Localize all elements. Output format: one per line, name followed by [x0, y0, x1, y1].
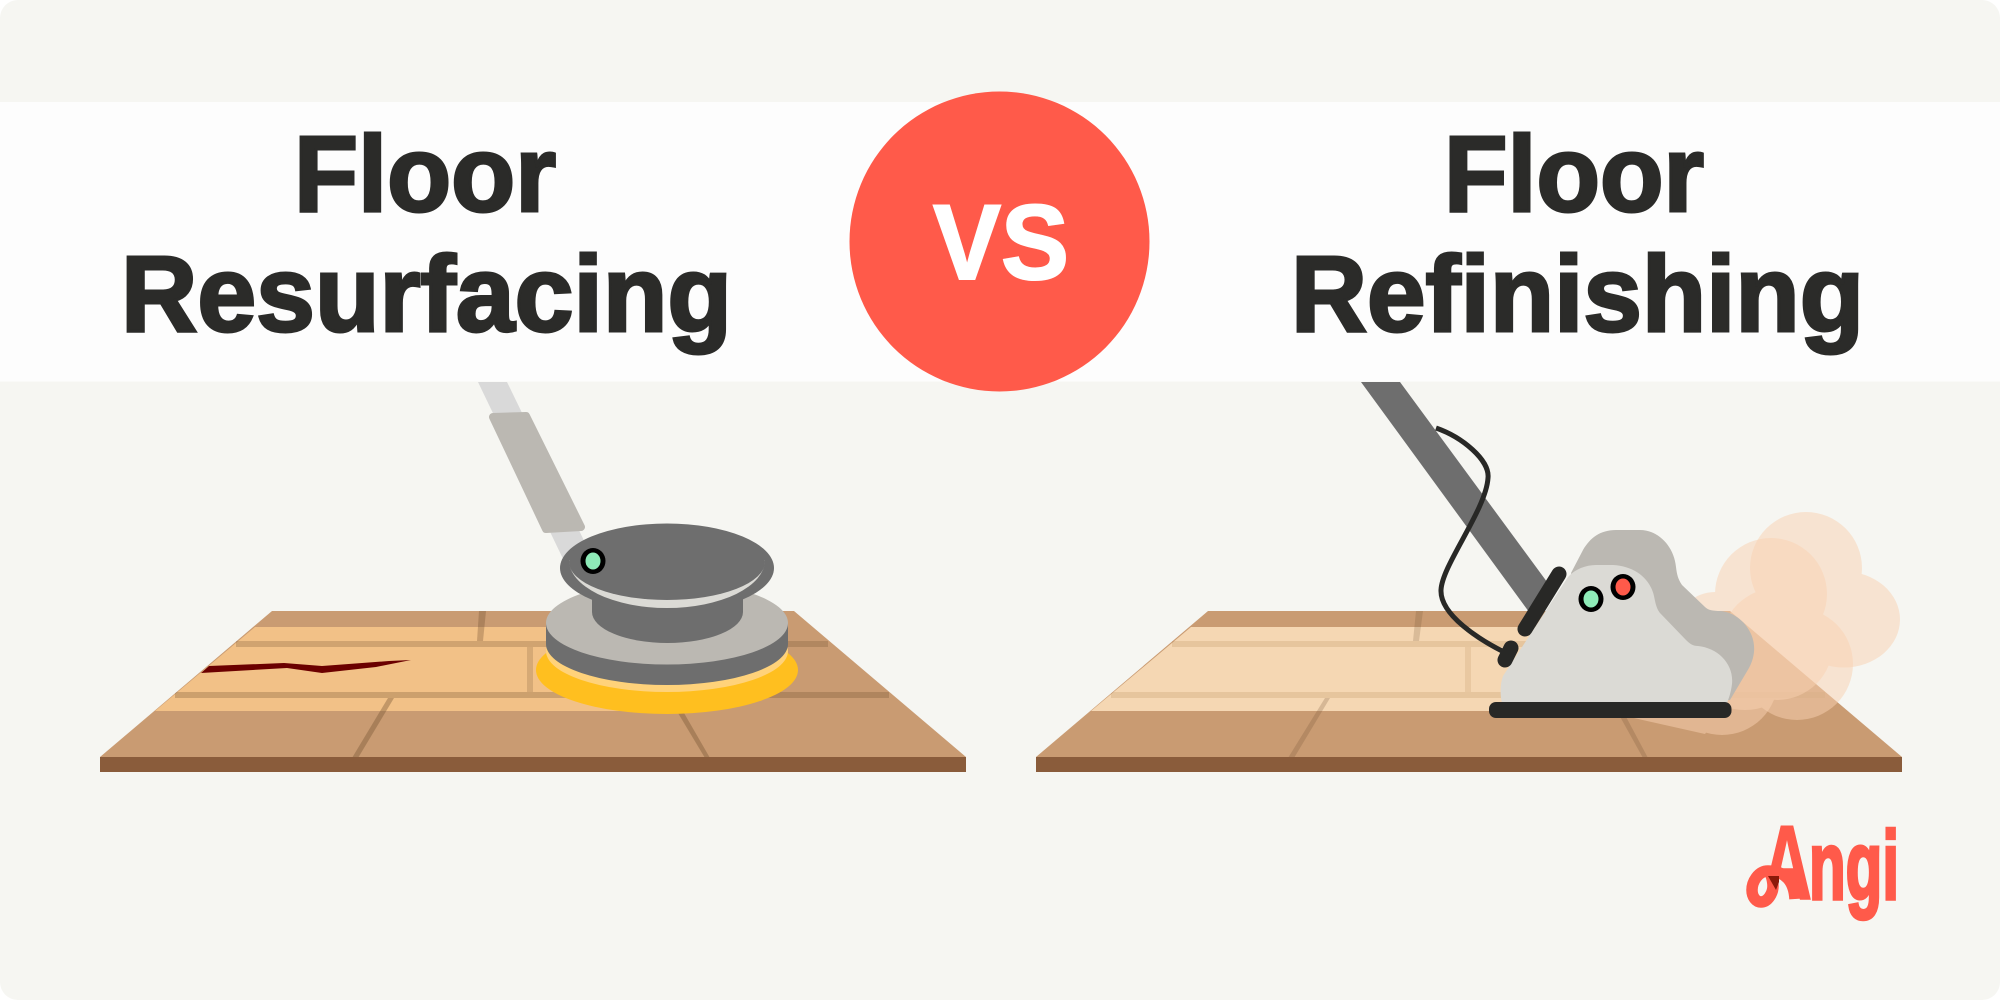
sander handle bar — [1525, 574, 1559, 629]
heading: floor refinishing: Refinishing — [1291, 233, 1864, 354]
logo: angi — [1746, 826, 1896, 922]
illustration: orbital sander — [478, 382, 798, 714]
sander front housing — [1501, 565, 1732, 703]
sander handle pole — [1361, 382, 1550, 612]
heading: floor refinishing — [1291, 113, 1864, 354]
illustration: right wood floor — [1036, 611, 1902, 772]
sander pole — [478, 382, 608, 590]
power cord — [1436, 428, 1504, 652]
sander base bar — [1489, 702, 1732, 718]
heading: floor resurfacing: Floor — [294, 113, 556, 234]
heading: floor refinishing: Floor — [1444, 113, 1704, 234]
sander grip — [493, 416, 581, 529]
sander rear housing — [1571, 530, 1754, 700]
heading: floor resurfacing — [121, 113, 732, 354]
red light — [1610, 574, 1636, 600]
logo: angi: A — [1762, 804, 1812, 922]
sanding pad — [536, 626, 798, 714]
sander neck — [592, 590, 743, 643]
green light — [1578, 586, 1604, 612]
illustration: drum floor sander — [1361, 382, 1754, 718]
sander head — [560, 524, 774, 612]
illustration: left wood floor — [100, 611, 966, 772]
power light — [580, 548, 606, 574]
heading: floor resurfacing: Resurfacing — [121, 233, 732, 354]
vs badge — [850, 92, 1150, 392]
dust cloud — [1625, 512, 1900, 735]
vs badge: VS — [933, 182, 1069, 302]
crack in floor — [201, 660, 411, 673]
logo: angi: ngi — [1809, 811, 1899, 920]
sander body base — [546, 623, 788, 685]
lower handle — [1505, 648, 1511, 660]
title band — [0, 102, 2000, 382]
